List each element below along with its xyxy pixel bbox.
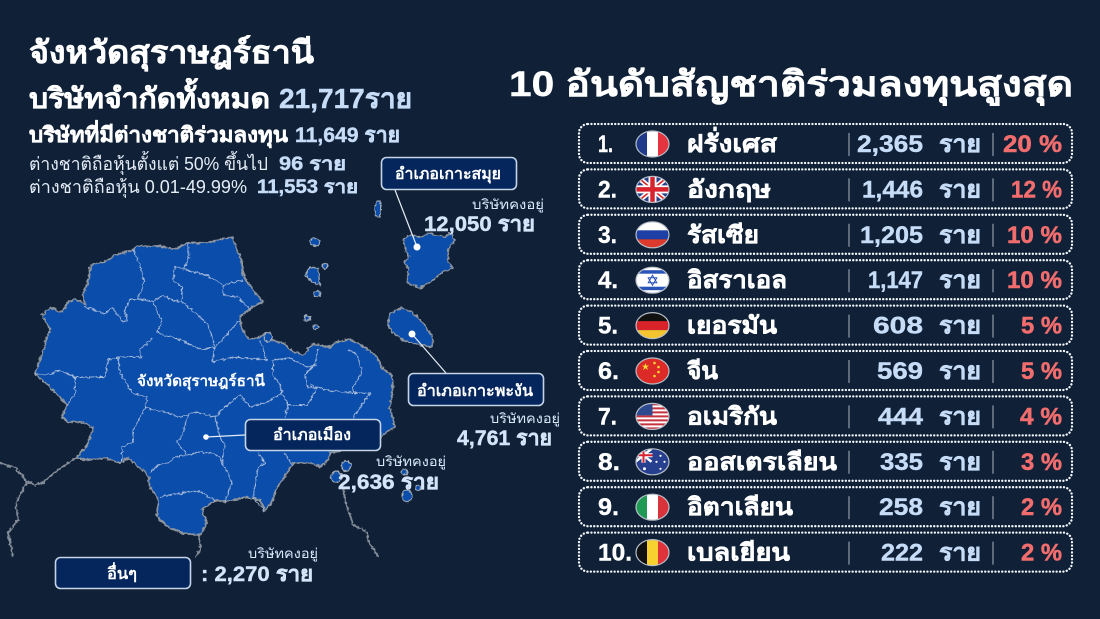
- callout: others: [56, 546, 318, 588]
- row 1: France: 1.: [598, 131, 613, 158]
- callout: Ko Pha-ngan: อำเภอเกาะพะงัน: [417, 382, 533, 400]
- row 6: China: ราย: [939, 358, 981, 385]
- callout: Ko Pha-ngan: บริษัทคงอยู่: [490, 411, 560, 427]
- row 2: United Kingdom: ราย: [939, 176, 981, 203]
- stat: foreign holding below 50 percent: [29, 177, 358, 198]
- row 4: Israel: 1,147: [868, 267, 923, 294]
- callout: others: บริษัทคงอยู่: [248, 546, 318, 562]
- callout: Mueang district: อำเภอเมือง: [273, 426, 351, 444]
- row 7: United States: [579, 396, 1072, 435]
- row 5: Germany: เยอรมัน: [687, 313, 778, 340]
- callout: Ko Samui: อำเภอเกาะสมุย: [395, 165, 501, 184]
- row 8: Australia: 3 %: [1021, 449, 1062, 476]
- row 2: United Kingdom: [579, 169, 1072, 208]
- row 1: France: [579, 124, 1072, 163]
- headline: total companies: 21,717ราย: [279, 83, 412, 114]
- row 4: Israel: ราย: [939, 267, 981, 294]
- title: province name: จังหวัดสุราษฎร์ธานี: [29, 35, 314, 72]
- callout: Ko Samui: 12,050 ราย: [424, 213, 535, 236]
- row 3: Russia: [579, 215, 1072, 254]
- stat: foreign holding 50 percent up: 96 ราย: [279, 154, 346, 175]
- row 1: France: ฝรั่งเศส: [687, 126, 777, 158]
- row 1: France: ราย: [939, 131, 981, 158]
- row 8: Australia: [579, 442, 1072, 481]
- ranking table: [579, 124, 1072, 572]
- row 5: Germany: 5.: [598, 313, 618, 340]
- stat: foreign holding 50 percent up: [29, 151, 346, 175]
- row 2: United Kingdom: 12 %: [1011, 176, 1062, 203]
- row 5: Germany: 608: [873, 313, 923, 340]
- row 9: Italy: 2 %: [1021, 494, 1062, 521]
- row 3: Russia: 1,205: [860, 222, 923, 249]
- row 3: Russia: 10 %: [1007, 222, 1062, 249]
- row 9: Italy: 9.: [598, 494, 619, 521]
- Ko Samui island: [403, 233, 455, 288]
- neighbouring province borders: [0, 457, 378, 557]
- row 9: Italy: ราย: [939, 494, 981, 521]
- row 6: China: 5 %: [1021, 358, 1062, 385]
- row 7: United States: ราย: [939, 403, 981, 430]
- callout: Ko Pha-ngan: [408, 330, 560, 450]
- row 4: Israel: [579, 260, 1072, 299]
- row 3: Russia: ราย: [939, 222, 981, 249]
- row 1: France: 20 %: [1003, 131, 1062, 158]
- row 8: Australia: 335: [880, 449, 923, 476]
- row 6: China: [579, 351, 1072, 390]
- callout: others: อื่นๆ: [107, 562, 137, 583]
- subheading: foreign co-investment: [29, 119, 400, 149]
- row 7: United States: 444: [878, 403, 924, 430]
- row 7: United States: 7.: [598, 403, 617, 430]
- row 2: United Kingdom: 2.: [598, 176, 617, 203]
- callout: Mueang district: 2,636 ราย: [338, 471, 439, 494]
- row 10: Belgium: [579, 533, 1072, 572]
- small islands: [264, 201, 420, 502]
- row 5: Germany: [579, 306, 1072, 345]
- map: Surat Thani province: [0, 201, 455, 557]
- row 10: Belgium: 2 %: [1021, 540, 1062, 567]
- province label on map: จังหวัดสุราษฎร์ธานี: [137, 372, 266, 391]
- flag: Australia: [636, 448, 670, 476]
- row 4: Israel: 4.: [598, 267, 618, 294]
- district borders: [35, 243, 370, 511]
- row 10: Belgium: ราย: [939, 540, 981, 567]
- row 4: Israel: อิสราเอล: [687, 267, 787, 294]
- flag: China: [636, 357, 670, 385]
- row 8: Australia: ราย: [939, 449, 981, 476]
- row 1: France: 2,365: [857, 131, 923, 158]
- row 7: United States: อเมริกัน: [687, 403, 778, 430]
- row 2: United Kingdom: อังกฤษ: [687, 176, 771, 203]
- flag: France: [636, 130, 670, 158]
- row 10: Belgium: เบลเยียน: [687, 540, 791, 567]
- subheading: foreign co-investment: บริษัทที่มีต่างชาติร่วมลงทุน: [29, 119, 289, 149]
- row 6: China: 569: [877, 358, 923, 385]
- row 4: Israel: 10 %: [1007, 267, 1062, 294]
- row 2: United Kingdom: 1,446: [862, 176, 923, 203]
- callout: Mueang district: [203, 420, 446, 494]
- stat: foreign holding 50 percent up: ต่างชาติถือหุ้นตั้งแต่ 50% ขึ้นไป: [29, 151, 268, 175]
- row 7: United States: 4 %: [1020, 403, 1062, 430]
- flag: Germany: [636, 312, 670, 340]
- headline: total companies: บริษัทจำกัดทั้งหมด: [29, 77, 270, 114]
- headline: total companies: [29, 77, 412, 114]
- row 9: Italy: [579, 487, 1072, 526]
- row 3: Russia: รัสเซีย: [687, 222, 759, 249]
- flag: Israel: [636, 266, 670, 294]
- flag: United States: [636, 402, 670, 430]
- flag: United Kingdom: [636, 175, 670, 203]
- row 9: Italy: อิตาเลียน: [687, 494, 794, 521]
- row 9: Italy: 258: [879, 494, 923, 521]
- row 10: Belgium: 222: [881, 540, 923, 567]
- row 6: China: จีน: [687, 358, 719, 385]
- stat: foreign holding below 50 percent: 11,553 ราย: [257, 177, 358, 198]
- callout: Ko Pha-ngan: 4,761 ราย: [457, 427, 552, 450]
- callout: Mueang district: บริษัทคงอยู่: [376, 454, 446, 470]
- row 10: Belgium: 10.: [598, 540, 632, 567]
- mainland districts: [35, 237, 395, 535]
- row 5: Germany: ราย: [939, 313, 981, 340]
- subheading: foreign co-investment: 11,649 ราย: [295, 124, 400, 147]
- heading: top 10 nationalities: 10 อันดับสัญชาติร่วมลงทุนสูงสุด: [509, 65, 1073, 106]
- stat: foreign holding below 50 percent: ต่างชาติถือหุ้น 0.01-49.99%: [29, 177, 247, 198]
- flag: Italy: [636, 493, 670, 521]
- row 6: China: 6.: [598, 358, 619, 385]
- callout: Ko Samui: บริษัทคงอยู่: [472, 197, 544, 213]
- flag: Russia: [636, 221, 670, 249]
- row 3: Russia: 3.: [598, 222, 617, 249]
- flag: Belgium: [636, 539, 670, 567]
- callout: others: : 2,270 ราย: [201, 563, 313, 586]
- callout: Ko Samui: [382, 158, 544, 250]
- row 5: Germany: 5 %: [1021, 313, 1062, 340]
- row 8: Australia: 8.: [598, 449, 620, 476]
- row 8: Australia: ออสเตรเลียน: [687, 449, 838, 476]
- Ko Pha-ngan island: [388, 308, 433, 347]
